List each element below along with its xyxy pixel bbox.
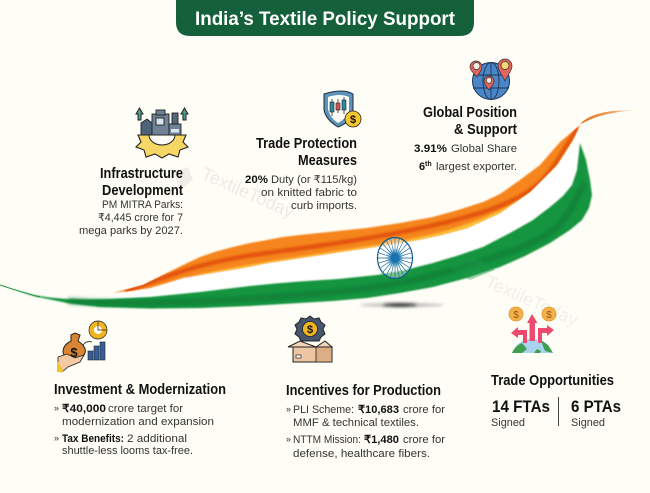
icon: factory on gear [136,108,188,158]
bullet list: crore for [403,404,445,416]
text block: 20% [245,174,268,186]
bullet list: » [54,433,59,443]
heading: & Support [454,121,517,138]
heading: Global Position [423,104,517,121]
text block: 6 [419,161,425,173]
panel: investment and modernization [54,321,226,457]
title banner [176,0,474,36]
heading [100,165,183,199]
heading: Investment & Modernization [54,381,226,398]
icon: globe with pins [470,59,512,100]
bullet list: crore for [403,434,445,446]
icon: box with gear [288,316,332,362]
text block: Global Share [451,143,517,155]
icon: ashoka chakra [378,238,412,278]
stat: 6 PTAs: Signed [571,417,605,429]
bullet list: ₹40,000 [62,403,106,415]
panel: trade protection measures [245,91,361,212]
bullet list: modernization and expansion [62,416,214,428]
heading [423,104,517,138]
text block: mega parks by 2027. [79,225,183,237]
bullet list: Tax Benefits: [62,433,124,445]
icon: globe with arrows and coins [509,307,556,353]
text block: Duty (or ₹115/kg) [271,174,357,186]
bullet list: » [286,434,291,444]
text block: curb imports. [291,200,357,212]
ribbon tail [580,110,637,124]
green band [0,143,592,308]
orange band [113,125,580,293]
watermark over wave [447,257,581,330]
bullet list: ₹1,480 [364,434,399,446]
bullet list: defense, healthcare fibers. [293,448,430,460]
stat: 6 PTAs [571,398,621,429]
text block: ₹4,445 crore for 7 [98,212,183,224]
heading: Incentives for Production [286,382,441,399]
icon: money bag, hand and chart [57,321,107,372]
stat: 6 PTAs: 6 PTAs [571,398,621,416]
watermark: TextileToday [198,163,297,222]
icon: box with gear: $ [307,324,313,336]
text block [245,174,357,212]
icon: globe with arrows and coins: $ [513,310,519,321]
heading: Trade Opportunities [491,372,614,389]
bullet list: shuttle-less looms tax-free. [62,445,193,457]
panel: incentives for production [286,316,445,460]
watermark over wave: TextileToday [482,271,581,330]
icon: money bag, hand and chart: $ [70,345,78,360]
stat: 14 FTAs [491,398,550,429]
title banner: India’s Textile Policy Support [195,9,456,30]
bullet list: ₹10,683 [358,404,399,416]
heading: Trade Protection [256,135,357,152]
bullet list [54,403,214,457]
bullet list: » [286,404,291,414]
bullet list: MMF & technical textiles. [293,417,419,429]
stat: 14 FTAs: Signed [491,417,525,429]
bullet list [286,404,445,460]
white band [110,130,580,299]
text block: largest exporter. [436,161,517,173]
icon: shield with candles and coin: $ [350,114,356,126]
text block: 3.91% [414,143,447,155]
bullet list: 2 additional [127,433,187,445]
tricolour flag wave [0,110,637,308]
heading: Development [102,182,183,199]
text block [79,199,183,237]
bullet list: » [54,403,59,413]
heading: Measures [298,152,357,169]
text block: PM MITRA Parks: [102,199,183,211]
bullet list: NTTM Mission: [293,434,361,446]
text block: th [425,161,432,168]
icon: globe with arrows and coins: $ [546,310,552,321]
bullet list: PLI Scheme: [293,404,354,416]
heading [256,135,357,169]
stat: 14 FTAs: 14 FTAs [492,398,550,416]
text block: on knitted fabric to [261,187,357,199]
panel: infrastructure development [79,108,188,237]
panel: global position and support [414,59,517,173]
panel: trade opportunities [491,307,621,429]
bullet list: crore target for [108,403,183,415]
shadow under wave [360,304,444,306]
heading: Infrastructure [100,165,183,182]
text block [414,143,517,173]
